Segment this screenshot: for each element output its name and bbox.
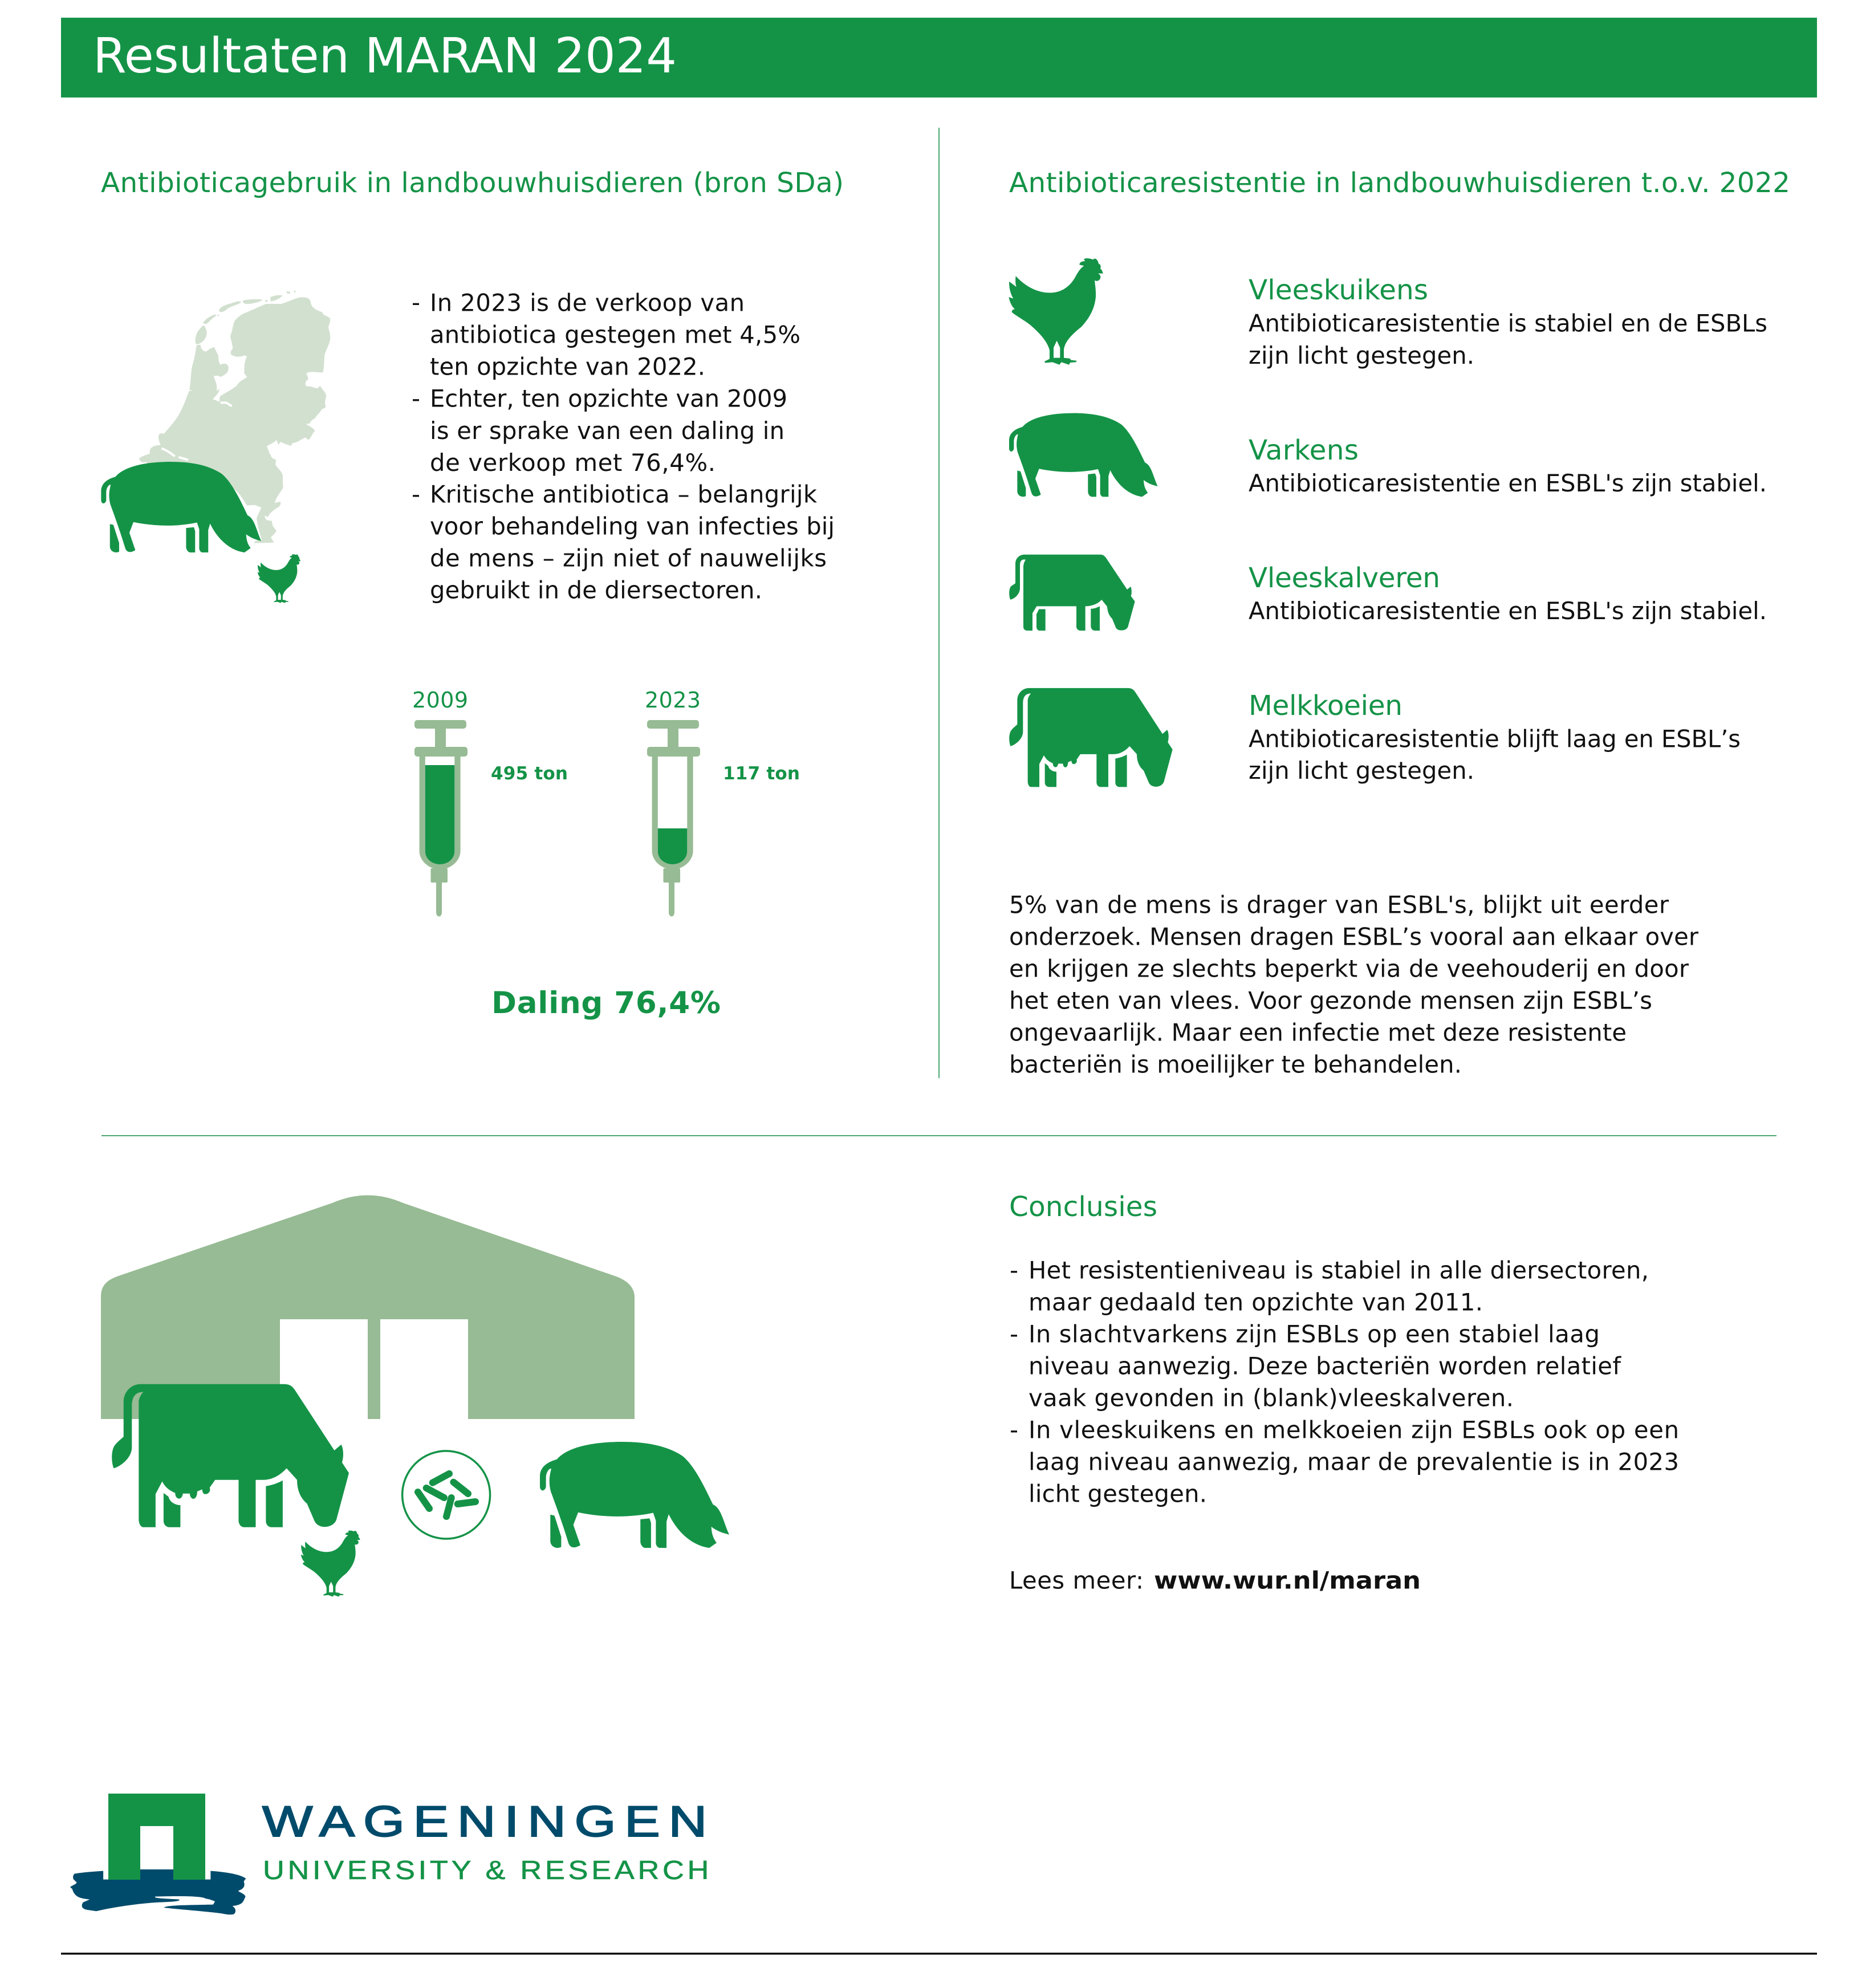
text block: verkoop antibiotica: voor behandeling van infecties bij bbox=[430, 512, 835, 540]
map: Netherlands bbox=[139, 291, 330, 543]
text block: verkoop antibiotica: - bbox=[412, 384, 420, 413]
text block: verkoop antibiotica: Kritische antibiotica – belangrijk bbox=[430, 480, 818, 509]
icon: pig bbox=[101, 462, 261, 552]
panel: vleeskalveren bbox=[1009, 555, 1767, 631]
logo wordmark: UNIVERSITY & RESEARCH bbox=[263, 1855, 712, 1885]
text block: verkoop antibiotica bbox=[412, 288, 835, 604]
text block: conclusies: vaak gevonden in (blank)vleeskalveren. bbox=[1028, 1384, 1514, 1412]
text block: conclusies: In slachtvarkens zijn ESBLs op een stabiel laag bbox=[1028, 1320, 1600, 1348]
panel: vleeskuikens bbox=[1009, 258, 1767, 369]
illustration: barn with animals bbox=[101, 1195, 729, 1597]
text block: conclusies: - bbox=[1010, 1320, 1018, 1348]
text: vleeskalveren: Antibioticaresistentie en ESBL's zijn stabiel. bbox=[1249, 597, 1767, 625]
heading: antibioticaresistentie: Antibioticaresistentie in landbouwhuisdieren t.o.v. 2022 bbox=[1009, 167, 1790, 199]
text: vleeskuikens: Antibioticaresistentie is stabiel en de ESBLs bbox=[1249, 309, 1767, 338]
text block: verkoop antibiotica: ten opzichte van 2022. bbox=[430, 352, 705, 381]
chart: syringe 2009: 2009 bbox=[412, 688, 468, 713]
logo mark bbox=[70, 1794, 246, 1914]
icon: chicken bbox=[1009, 258, 1103, 365]
logo wordmark bbox=[262, 1798, 716, 1885]
text: varkens bbox=[1249, 434, 1767, 497]
text: varkens: Varkens bbox=[1249, 434, 1359, 466]
text block: conclusies: licht gestegen. bbox=[1028, 1480, 1207, 1507]
chart: syringe 2009: 495 ton bbox=[491, 763, 568, 784]
text block: verkoop antibiotica: is er sprake van een daling in bbox=[430, 417, 784, 445]
map of the Netherlands with pig and chicken bbox=[101, 291, 330, 603]
text block: conclusies bbox=[1010, 1257, 1679, 1507]
text block: verkoop antibiotica: Echter, ten opzichte van 2009 bbox=[430, 384, 787, 413]
text block: ESBL paragraph: 5% van de mens is drager van ESBL's, blijkt uit eerder bbox=[1009, 891, 1669, 919]
text block: ESBL paragraph: onderzoek. Mensen dragen ESBL’s vooral aan elkaar over bbox=[1009, 922, 1699, 951]
text: melkkoeien: zijn licht gestegen. bbox=[1249, 757, 1474, 784]
text block: verkoop antibiotica: - bbox=[412, 480, 420, 509]
link: lees meer: www.wur.nl/maran bbox=[1154, 1567, 1421, 1594]
text block: conclusies: Het resistentieniveau is stabiel in alle diersectoren, bbox=[1028, 1257, 1649, 1284]
text block: conclusies: laag niveau aanwezig, maar de prevalentie is in 2023 bbox=[1028, 1448, 1679, 1475]
callout: daling: Daling 76,4% bbox=[491, 986, 721, 1021]
text block: verkoop antibiotica: - bbox=[412, 288, 420, 316]
icon: bacteria circle bbox=[403, 1451, 490, 1539]
chart: syringe 2023: 2023 bbox=[645, 688, 701, 713]
heading: antibioticagebruik: Antibioticagebruik in landbouwhuisdieren (bron SDa) bbox=[101, 167, 844, 199]
text block: ESBL paragraph: ongevaarlijk. Maar een infectie met deze resistente bbox=[1009, 1018, 1627, 1047]
link: lees meer bbox=[1009, 1567, 1421, 1594]
title banner bbox=[61, 18, 1817, 97]
panel: melkkoeien bbox=[1009, 688, 1741, 787]
icon: pig bbox=[1009, 413, 1158, 497]
title banner: Resultaten MARAN 2024 bbox=[93, 28, 677, 84]
text block: conclusies: maar gedaald ten opzichte van 2011. bbox=[1028, 1288, 1483, 1316]
icon: chicken bbox=[258, 554, 300, 603]
text block: conclusies: - bbox=[1010, 1416, 1018, 1444]
text block: verkoop antibiotica: antibiotica gestegen met 4,5% bbox=[430, 320, 800, 349]
text block: verkoop antibiotica: In 2023 is de verkoop van bbox=[430, 288, 745, 317]
icon: chicken bbox=[301, 1531, 360, 1597]
text block: conclusies: - bbox=[1010, 1257, 1018, 1284]
text: melkkoeien: Antibioticaresistentie blijft laag en ESBL’s bbox=[1249, 725, 1741, 753]
text block: verkoop antibiotica: de mens – zijn niet of nauwelijks bbox=[430, 544, 827, 572]
text: melkkoeien bbox=[1249, 690, 1741, 784]
icon: pig bbox=[540, 1442, 729, 1548]
text: vleeskalveren: Vleeskalveren bbox=[1249, 562, 1440, 594]
chart: syringe 2023 bbox=[645, 688, 800, 917]
text block: ESBL paragraph bbox=[1009, 891, 1699, 1079]
text block: ESBL paragraph: bacteriën is moeilijker te behandelen. bbox=[1009, 1050, 1462, 1079]
icon: cow bbox=[1009, 688, 1173, 787]
text block: ESBL paragraph: het eten van vlees. Voor gezonde mensen zijn ESBL’s bbox=[1009, 986, 1652, 1015]
barn bbox=[101, 1195, 635, 1419]
logo wordmark: WAGENINGEN bbox=[262, 1798, 716, 1846]
text block: conclusies: niveau aanwezig. Deze bacteriën worden relatief bbox=[1028, 1352, 1621, 1380]
text: vleeskuikens: zijn licht gestegen. bbox=[1249, 342, 1474, 369]
text block: ESBL paragraph: en krijgen ze slechts beperkt via de veehouderij en door bbox=[1009, 954, 1689, 983]
text block: conclusies: In vleeskuikens en melkkoeien zijn ESBLs ook op een bbox=[1028, 1416, 1679, 1444]
panel: varkens bbox=[1009, 413, 1767, 497]
logo: Wageningen University & Research bbox=[70, 1794, 716, 1914]
text: vleeskalveren bbox=[1249, 562, 1767, 625]
text: vleeskuikens bbox=[1249, 274, 1767, 369]
chart: syringe 2023: 117 ton bbox=[723, 763, 800, 784]
link: lees meer: Lees meer: bbox=[1009, 1567, 1144, 1594]
text: melkkoeien: Melkkoeien bbox=[1249, 690, 1402, 722]
text: vleeskuikens: Vleeskuikens bbox=[1249, 274, 1428, 306]
text block: verkoop antibiotica: de verkoop met 76,4%. bbox=[430, 449, 716, 477]
text: varkens: Antibioticaresistentie en ESBL's zijn stabiel. bbox=[1249, 469, 1767, 497]
heading: conclusies: Conclusies bbox=[1009, 1191, 1157, 1223]
chart: syringe 2009 bbox=[412, 688, 568, 917]
icon: calf bbox=[1009, 555, 1135, 631]
text block: verkoop antibiotica: gebruikt in de diersectoren. bbox=[430, 576, 762, 604]
icon: cow bbox=[112, 1384, 349, 1527]
